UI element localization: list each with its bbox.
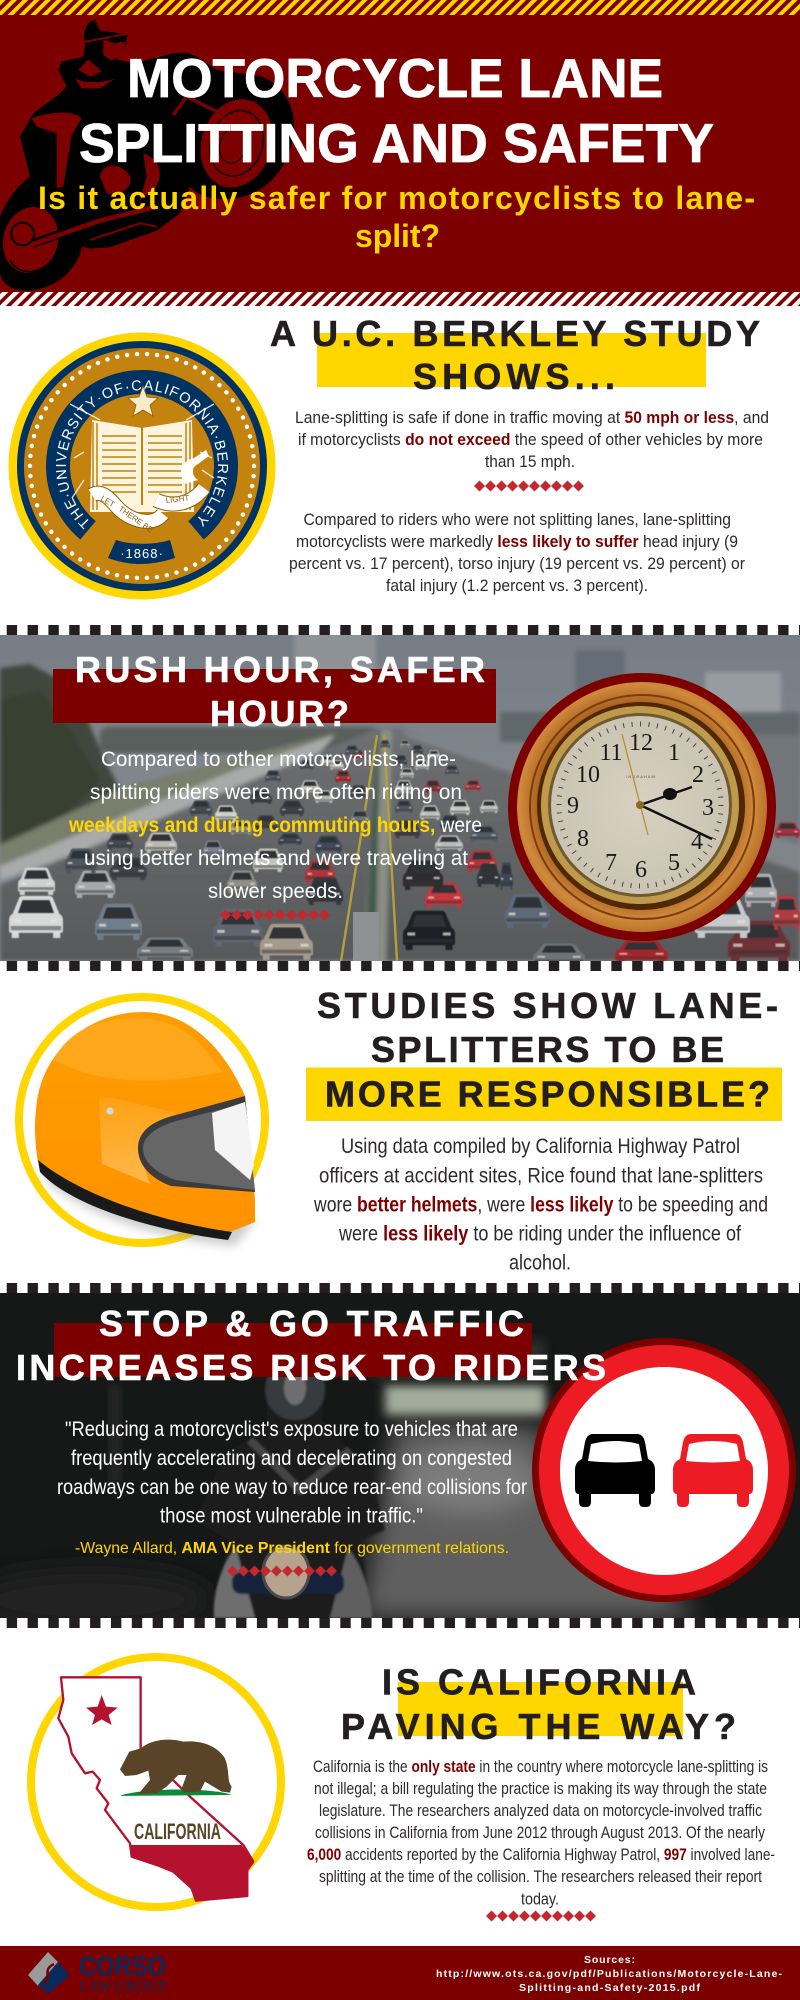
- sources: Splitting-and-Safety-2015.pdf: [519, 1982, 700, 1994]
- text block: commuting riders: Compared to other motorcyclists, lane-: [101, 748, 456, 771]
- icon: motorcycle rider silhouette: [0, 20, 294, 291]
- text block: quote: frequently accelerating and decelerating on congested: [71, 1447, 512, 1470]
- footer background: [0, 1946, 800, 2000]
- text block: injury comparison: motorcyclists were markedly less likely to suffer head injury (9: [296, 532, 738, 551]
- icon: wall clock: 4: [691, 829, 703, 855]
- icon: university seal: THERE BE: [117, 504, 155, 535]
- road sign: [353, 912, 379, 961]
- text block: california study: 6,000 accidents reported by the California Highway Patrol, 997 involved lane-: [307, 1846, 775, 1864]
- divider strip: [0, 961, 800, 971]
- subtitle: [38, 180, 755, 254]
- divider strip: [0, 1618, 800, 1628]
- icon: wall clock: 5: [668, 850, 680, 876]
- panel: header: [0, 0, 800, 306]
- subtitle: split?: [355, 218, 440, 254]
- heading: SHOWS...: [413, 356, 615, 397]
- heading: [53, 649, 496, 734]
- logo text: CORSO: [79, 1951, 166, 1982]
- panel: footer: [0, 1946, 800, 2000]
- subtitle: Is it actually safer for motorcyclists to lane-: [38, 180, 755, 216]
- icon: wall clock: 3: [702, 795, 714, 821]
- text block: rice findings: [313, 1135, 768, 1275]
- panel: rush hour: [0, 630, 800, 966]
- icon: university seal: LIGHT: [165, 494, 190, 505]
- icon: wall clock: 6: [635, 857, 647, 883]
- heading: INCREASES RISK TO RIDERS: [16, 1347, 606, 1388]
- text block: commuting riders: slower speeds.: [208, 880, 343, 903]
- sources: http://www.ots.ca.gov/pdf/Publications/Motorcycle-Lane-: [436, 1968, 782, 1980]
- logo text: LAW GROUP: [79, 1978, 166, 1995]
- text block: quote: roadways can be one way to reduce rear-end collisions for: [57, 1476, 527, 1499]
- icon: university seal: ·1868·: [120, 546, 164, 561]
- text block: injury comparison: fatal injury (1.2 percent vs. 3 percent).: [386, 576, 648, 595]
- text block: quote: those most vulnerable in traffic.": [160, 1505, 423, 1528]
- icon: wall clock: INGRAHAM: [626, 774, 656, 779]
- divider strip: [0, 625, 800, 635]
- text block: rice findings: wore better helmets, were less likely to be speeding and: [313, 1194, 768, 1216]
- highway centre lines: [341, 735, 397, 961]
- panel: stop and go: [0, 1293, 800, 1630]
- text block: quote: [57, 1418, 527, 1528]
- title: MOTORCYCLE LANE: [127, 47, 663, 109]
- diamond row: [220, 909, 330, 921]
- icon: orange helmet: [19, 997, 265, 1246]
- icon: california map and bear: CALIFORNIA: [134, 1819, 221, 1844]
- icon: wall clock: 12: [629, 730, 653, 756]
- icon: corso logo: [28, 1952, 70, 1994]
- traffic photo background: [0, 630, 800, 966]
- icon: wall clock: 10: [576, 762, 600, 788]
- divider strip: [0, 1283, 800, 1293]
- diamond row: [227, 1565, 337, 1577]
- icon: wall clock: 1: [668, 740, 680, 766]
- text block: commuting riders: [68, 748, 482, 903]
- icon: wall clock: [508, 673, 776, 941]
- text block: safe speed: than 15 mph.: [485, 452, 575, 471]
- icon: wall clock: 8: [577, 826, 589, 852]
- text block: safe speed: if motorcyclists do not exceed the speed of other vehicles by more: [298, 430, 763, 449]
- text block: commuting riders: using better helmets and were traveling at: [84, 847, 468, 870]
- heading: IS CALIFORNIA: [382, 1662, 696, 1703]
- text block: california study: [307, 1758, 775, 1908]
- heading: [306, 985, 782, 1121]
- logo text: [79, 1951, 166, 1995]
- attribution: -Wayne Allard, AMA Vice President for government relations.: [75, 1540, 509, 1557]
- icon: wall clock: 9: [567, 793, 579, 819]
- panel: U.C. Berkley study: [8, 313, 769, 600]
- heading: A U.C. BERKLEY STUDY: [270, 313, 760, 354]
- sources: [436, 1954, 782, 1994]
- icon: university seal: [8, 332, 276, 600]
- text block: rice findings: alcohol.: [509, 1252, 571, 1275]
- heading: STUDIES SHOW LANE-: [317, 985, 778, 1026]
- text block: injury comparison: percent vs. 17 percent), torso injury (19 percent vs. 29 percent) or: [289, 554, 745, 573]
- rider photo background: [0, 1293, 800, 1630]
- title: SPLITTING AND SAFETY: [79, 112, 714, 174]
- icon: no overtaking sign: [532, 1338, 796, 1602]
- heading: [270, 313, 760, 397]
- heading: STOP & GO TRAFFIC: [99, 1303, 524, 1344]
- heading: HOUR?: [210, 693, 349, 734]
- icon: wall clock: 7: [605, 850, 617, 876]
- diamond row: [486, 1910, 596, 1922]
- header bottom stripes: [0, 292, 800, 306]
- text block: injury comparison: [289, 510, 745, 595]
- text block: rice findings: were less likely to be riding under the influence of: [338, 1222, 741, 1246]
- text block: commuting riders: splitting riders were more often riding on: [90, 781, 462, 804]
- heading: MORE RESPONSIBLE?: [325, 1074, 770, 1114]
- text block: injury comparison: Compared to riders who were not splitting lanes, lane-splitting: [304, 510, 731, 529]
- text block: rice findings: Using data compiled by California Highway Patrol: [341, 1135, 740, 1158]
- header top stripes: [0, 0, 800, 15]
- icon: wall clock: 11: [599, 740, 623, 766]
- heading: RUSH HOUR, SAFER: [75, 649, 485, 690]
- text block: safe speed: Lane-splitting is safe if done in traffic moving at 50 mph or less, and: [295, 408, 769, 427]
- heading: SPLITTERS TO BE: [371, 1029, 724, 1070]
- heading: [341, 1662, 736, 1747]
- heading: PAVING THE WAY?: [341, 1706, 736, 1747]
- header background: [0, 15, 800, 292]
- panel: california: [31, 1657, 775, 1922]
- icon: wall clock: 2: [692, 762, 704, 788]
- icon: university seal: LET: [99, 494, 116, 509]
- text block: quote: "Reducing a motorcyclist's exposure to vehicles that are: [65, 1418, 518, 1441]
- panel: more responsible: [19, 985, 782, 1275]
- title: [79, 47, 714, 174]
- text block: california study: today.: [521, 1890, 559, 1908]
- diamond row: [474, 480, 584, 492]
- text block: safe speed: [295, 408, 769, 471]
- icon: california map and bear: [31, 1657, 281, 1907]
- sources: Sources:: [584, 1954, 635, 1966]
- text block: commuting riders: weekdays and during commuting hours, were: [68, 814, 482, 837]
- cars: [9, 740, 800, 966]
- heading: [16, 1303, 606, 1388]
- icon: university seal: THE·UNIVERSITY·OF·CALIFORNIA·BERKELEY: [56, 380, 228, 530]
